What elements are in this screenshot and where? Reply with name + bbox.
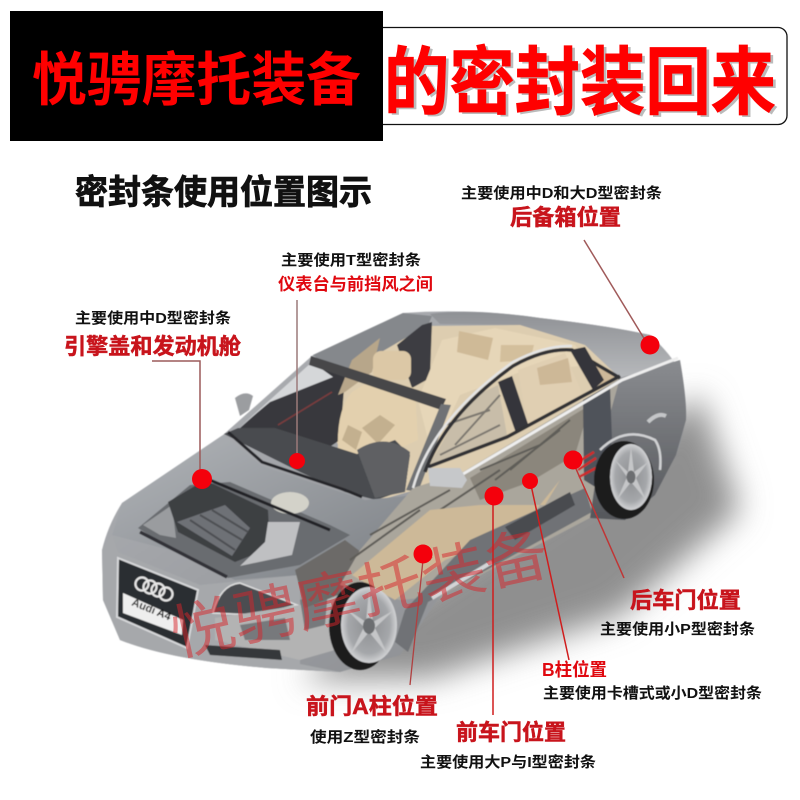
front wheel [329,582,397,670]
rounded title box [370,28,787,124]
label: dashboard: 主要使用T型密封条 [281,251,421,269]
label: rear door [600,588,755,638]
label: a pillar [306,694,438,746]
rear seat headrest in window [537,358,572,385]
door panel ghost [340,378,620,600]
leader lines and markers [152,240,660,715]
radiator side [143,505,176,538]
car body silhouette [102,311,685,672]
label: a pillar: 使用Z型密封条 [310,728,420,746]
label: engine: 主要使用中D型密封条 [75,309,231,327]
radiator bar [140,532,227,577]
engine block [168,480,270,562]
front bumper [102,535,340,672]
label: dashboard [278,251,433,294]
dark interior strut [397,322,432,388]
sill highlights [432,506,552,598]
wheel arch highlight [600,434,660,470]
lower door dark [395,488,592,652]
label: b pillar: 主要使用卡槽式或小D型密封条 [543,684,762,702]
engine bay [138,482,350,578]
cover ribs [190,510,248,550]
label: a pillar: 前门A柱位置 [306,694,438,719]
rear seat [418,328,590,455]
audi rings [136,578,172,600]
steering area [357,441,410,498]
marker: front door [484,486,504,506]
label: dashboard: 仪表台与前挡风之间 [278,274,433,294]
rear window [518,353,583,430]
red vent line [278,392,332,425]
second rear headrest [500,345,534,362]
belt line [463,358,678,474]
suspension ghost [583,385,612,490]
marker: b pillar [522,473,538,489]
label: trunk [461,184,662,230]
line: dashboard [296,300,298,455]
strut bar [205,478,330,530]
left mirror [235,393,253,416]
front window ghost [440,395,500,455]
watermark: 悦骋摩托装备 [164,520,555,669]
front chassis ghost [215,585,340,660]
black shop name block [10,11,383,141]
quarter window [583,353,618,385]
marker: trunk [640,336,660,354]
label: rear door: 主要使用小P型密封条 [600,620,755,638]
front seat [338,378,418,455]
seat shade [342,415,395,450]
label: front door: 前车门位置 [456,720,566,745]
line: a pillar [410,560,423,685]
marker: dashboard [289,453,305,469]
side mirror [428,468,467,488]
car illustration [102,311,740,680]
dark lower door band [505,492,575,540]
line: rear door [573,462,624,578]
strut spring [578,452,596,477]
door internals [470,405,590,500]
front headrest [373,351,411,380]
label: front door: 主要使用大P与I型密封条 [420,753,596,771]
windshield light reflection [240,362,333,427]
interior beige [335,325,620,500]
cowl panel dark [224,428,410,500]
dash dark [238,362,345,460]
roof rail highlight [413,346,572,488]
label: engine [64,309,241,359]
windshield header [309,356,446,410]
rear lamp highlight [648,415,666,422]
marker: a pillar [414,544,432,564]
seat lower beige [352,480,560,600]
rear wheel [594,441,654,519]
top banner [10,11,787,141]
grille [117,558,198,648]
hood [112,435,415,580]
label: b pillar [542,659,762,702]
marker: rear door [564,450,582,470]
line: trunk [584,240,645,340]
rear fender dark [590,360,686,520]
ground shadow [300,395,740,680]
headlight [213,583,297,615]
label: engine: 引擎盖和发动机舱 [64,334,241,359]
line: b pillar [531,485,569,660]
rear deck [430,312,680,378]
roof shell [313,313,432,376]
line: engine [152,361,200,470]
line: front door [492,500,494,715]
license plate [123,593,183,635]
front seat wing [338,338,380,395]
c pillar [570,347,604,390]
coolant tank [271,492,309,514]
heading: 密封条使用位置图示 [75,174,372,212]
front window [428,385,507,467]
ghost lines [350,420,570,560]
label: rear door: 后车门位置 [630,588,741,613]
window frame [425,350,620,472]
front mechanism [295,540,365,608]
plate text: Audi A4 [130,597,173,624]
rear headrest [457,331,493,360]
label: trunk: 后备箱位置 [510,205,621,230]
b pillar [498,376,528,433]
shop name: 悦骋摩托装备 [32,48,361,113]
label: b pillar: B柱位置 [542,659,607,680]
bay detail [240,522,300,566]
wiper [228,432,362,497]
label: front door [420,720,596,771]
engine cover [177,505,250,556]
marker: engine [192,469,212,489]
label: trunk: 主要使用中D和大D型密封条 [461,184,662,202]
chassis dark details [240,590,328,640]
a pillar [406,404,451,492]
lower intake [205,645,282,660]
